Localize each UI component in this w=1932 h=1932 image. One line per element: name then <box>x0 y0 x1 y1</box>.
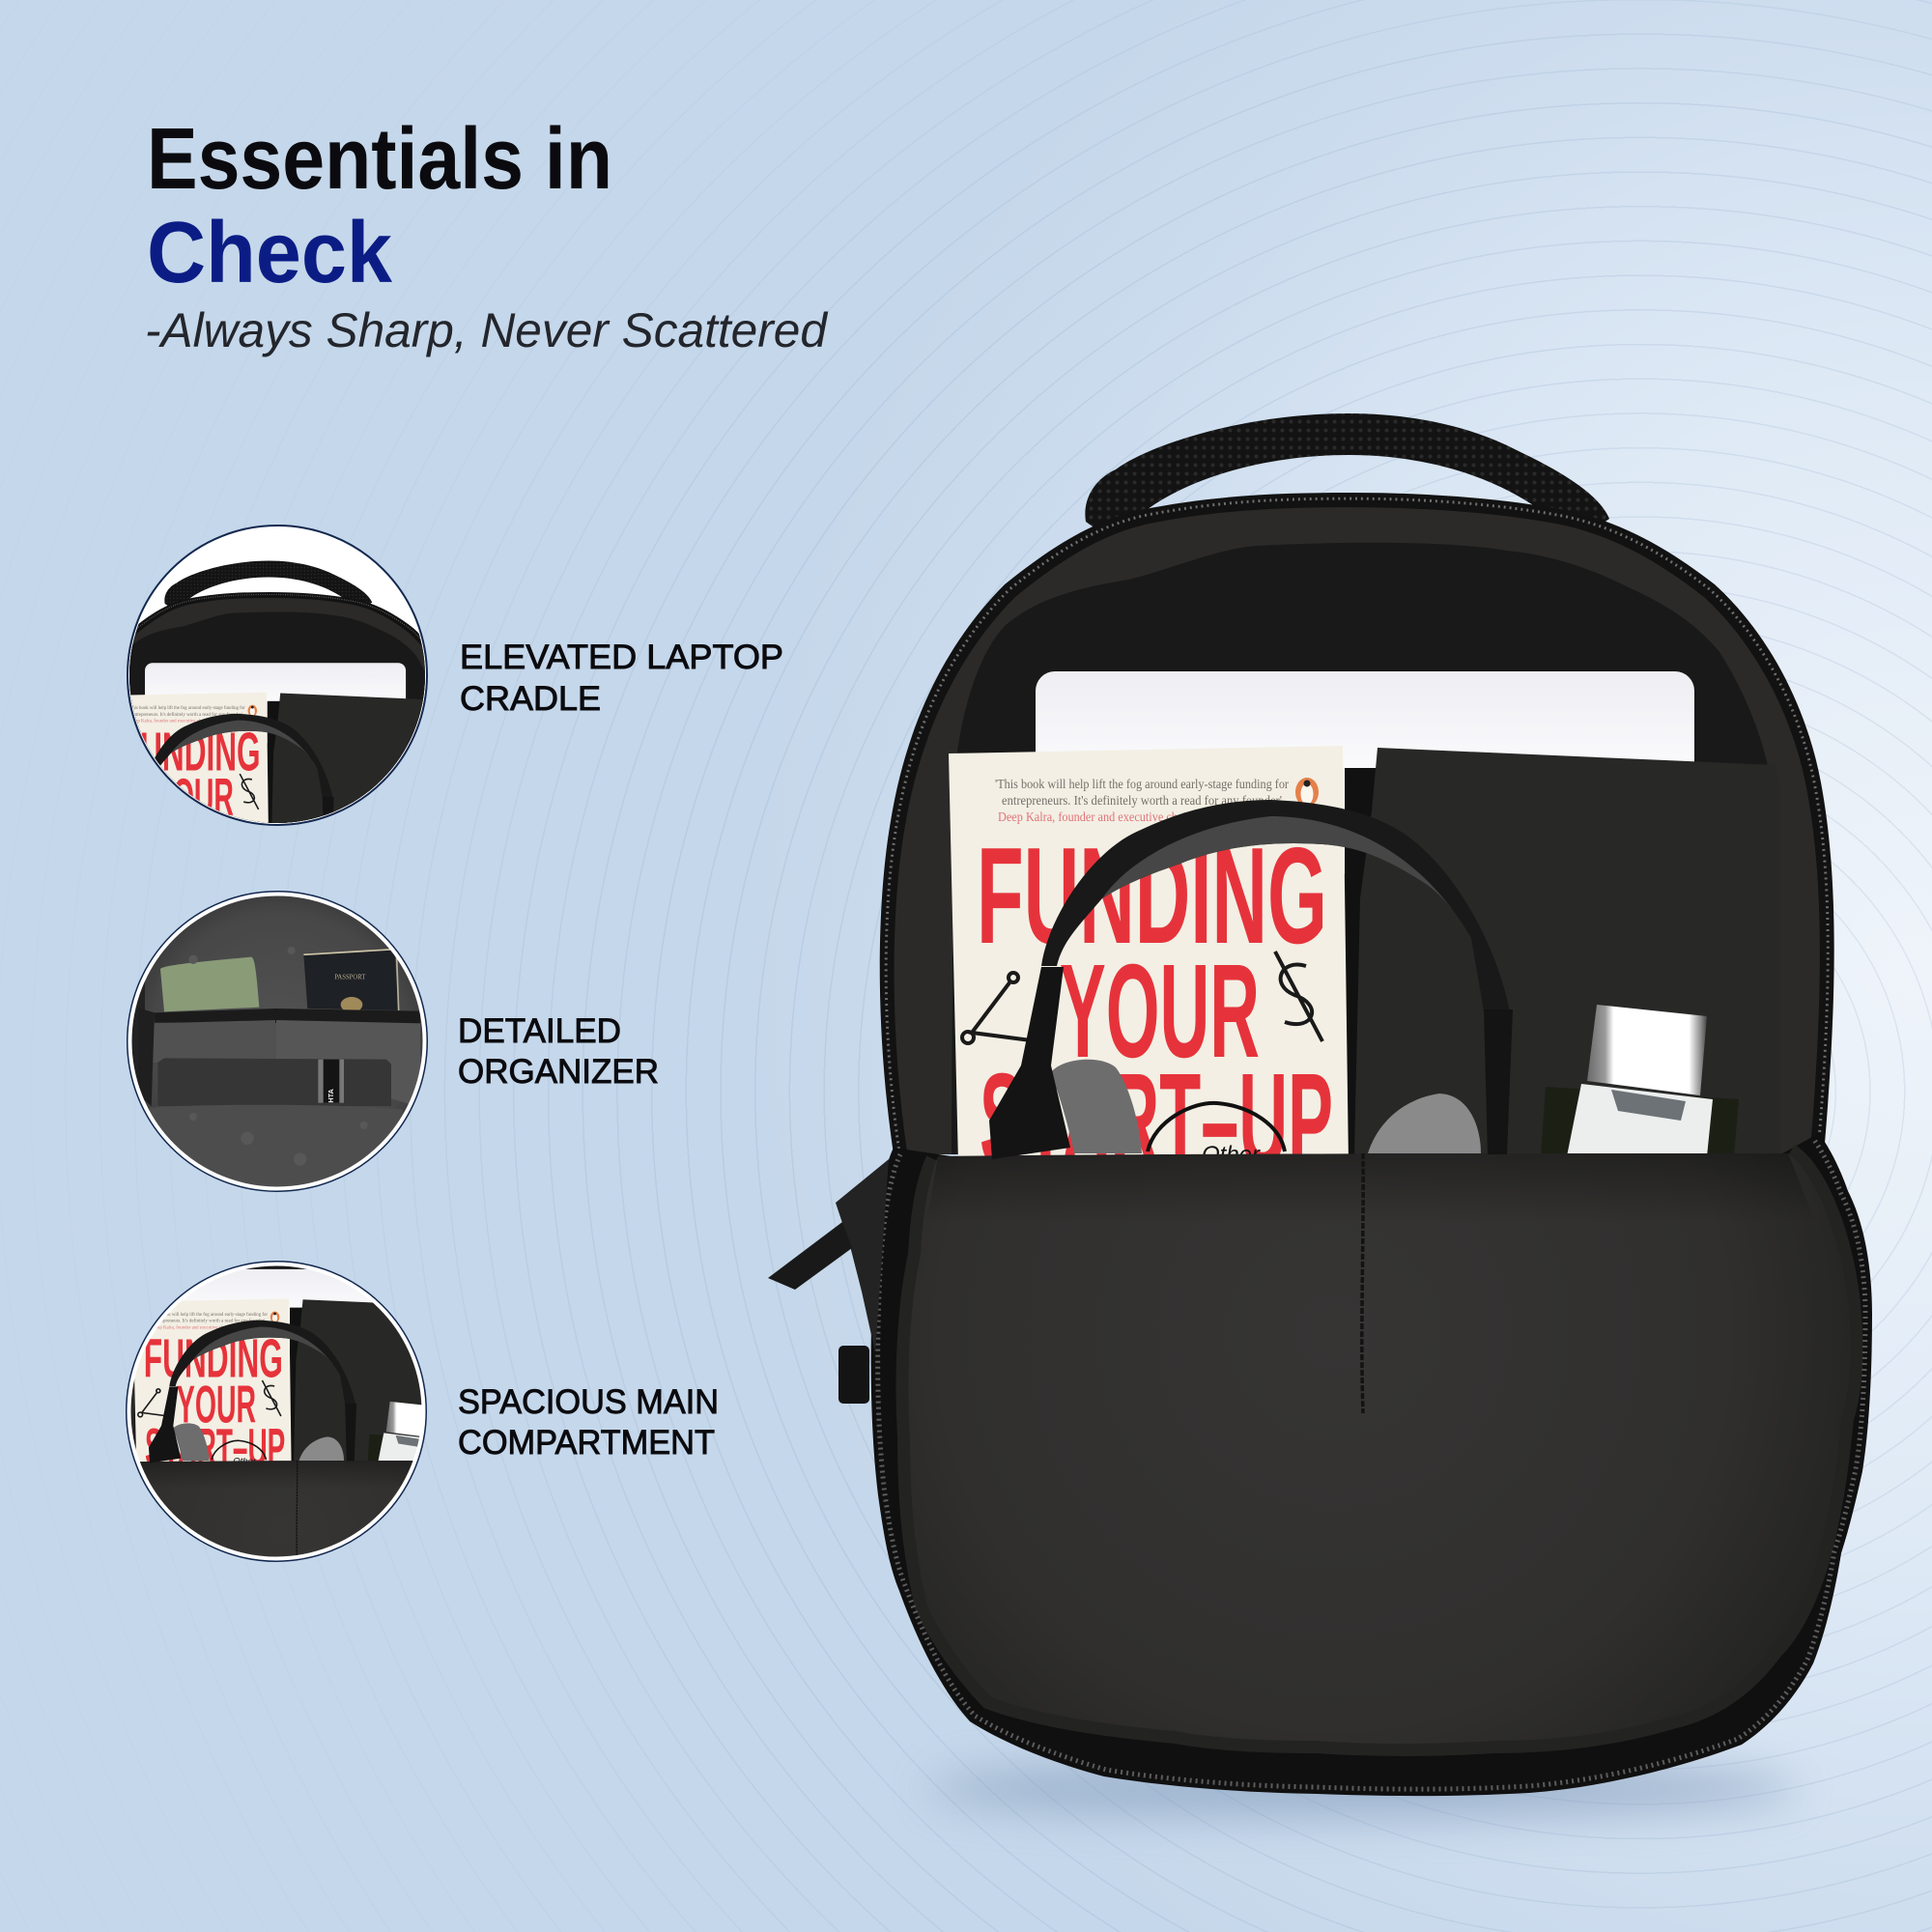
right ear cup <box>1368 1094 1481 1153</box>
panel: spacious main compartment <box>126 1261 717 1562</box>
book quote <box>995 778 1289 825</box>
ground shadow <box>927 1760 1797 1818</box>
label: CRADLE <box>460 680 601 718</box>
wall shading <box>131 981 145 1101</box>
lining rim <box>895 507 1820 1154</box>
heading <box>145 111 829 357</box>
panel: detailed organizer <box>126 889 659 1198</box>
panel: elevated laptop cradle <box>127 525 782 826</box>
lining top shadow <box>910 1153 1848 1741</box>
label: ELEVATED LAPTOP <box>460 639 783 676</box>
left stem <box>989 967 1070 1159</box>
book <box>949 746 1349 1195</box>
book quote: 'This book will help lift the fog around early-stage funding for <box>995 778 1289 792</box>
lining hem <box>908 1155 1850 1744</box>
passport <box>303 950 399 1012</box>
book cover title: START–UP <box>980 1046 1333 1195</box>
passport: PASSPORT <box>334 974 366 981</box>
lower panel <box>150 1105 402 1186</box>
book quote: Deep Kalra, founder and executive chairman <box>998 810 1210 825</box>
circle thumbnail 2 <box>126 889 435 1198</box>
pocket band <box>155 1009 420 1023</box>
laptop <box>1036 671 1694 874</box>
penguin logo <box>1295 778 1319 807</box>
headphones <box>989 800 1513 1159</box>
interior cavity <box>952 543 1777 1154</box>
book cover title: FUNDING <box>977 819 1327 973</box>
label: SPACIOUS MAIN <box>458 1383 719 1421</box>
velcro strip <box>157 1058 391 1106</box>
upper zipper <box>886 498 1828 1154</box>
brand tag: HTA <box>327 1088 335 1103</box>
lining <box>908 1153 1850 1744</box>
wallet <box>160 957 259 1011</box>
right stem <box>1484 1009 1513 1154</box>
perfume bottle <box>1541 1005 1739 1156</box>
dollar doodle <box>1275 952 1322 1041</box>
backpack photo illustration <box>871 413 1872 1818</box>
label: ORGANIZER <box>458 1053 659 1091</box>
seam <box>1362 1153 1363 1413</box>
upper pockets <box>153 1020 275 1063</box>
front pouch <box>871 1133 1872 1796</box>
headband <box>1041 800 1510 1011</box>
label: COMPARTMENT <box>458 1424 715 1462</box>
lining monogram marks <box>188 947 368 1166</box>
circle thumbnail 3 <box>126 1261 427 1562</box>
title line: Check: Check <box>147 205 393 301</box>
circle thumbnail 1 <box>127 525 428 826</box>
zipper pull strap <box>768 1222 852 1290</box>
title line: Essentials in: Essentials in <box>147 111 612 208</box>
left ear cup <box>1051 1060 1142 1153</box>
label <box>458 1012 659 1091</box>
left dark edge <box>145 1010 155 1106</box>
cable <box>1148 1103 1285 1151</box>
notebook <box>1354 748 1780 1154</box>
book quote: entrepreneurs. It's definitely worth a read for any founder' <box>1002 794 1282 809</box>
triangle doodle <box>962 973 1053 1043</box>
backpack upper shell <box>880 493 1834 1154</box>
subtitle: -Always Sharp, Never Scattered <box>145 303 829 357</box>
label <box>460 639 783 718</box>
handwritten scribble: Other <box>1202 1142 1261 1168</box>
zipper puller <box>838 1346 869 1404</box>
label <box>458 1383 719 1462</box>
pouch zipper <box>878 1140 1865 1789</box>
brand tag <box>318 1060 344 1103</box>
dark sleeve <box>1345 768 1403 1154</box>
book cover title: YOUR <box>1060 937 1260 1086</box>
top handle <box>1085 413 1609 529</box>
headband padding <box>1102 816 1471 938</box>
label: DETAILED <box>458 1012 621 1050</box>
book cover title <box>977 819 1333 1195</box>
side flap <box>836 1159 889 1352</box>
